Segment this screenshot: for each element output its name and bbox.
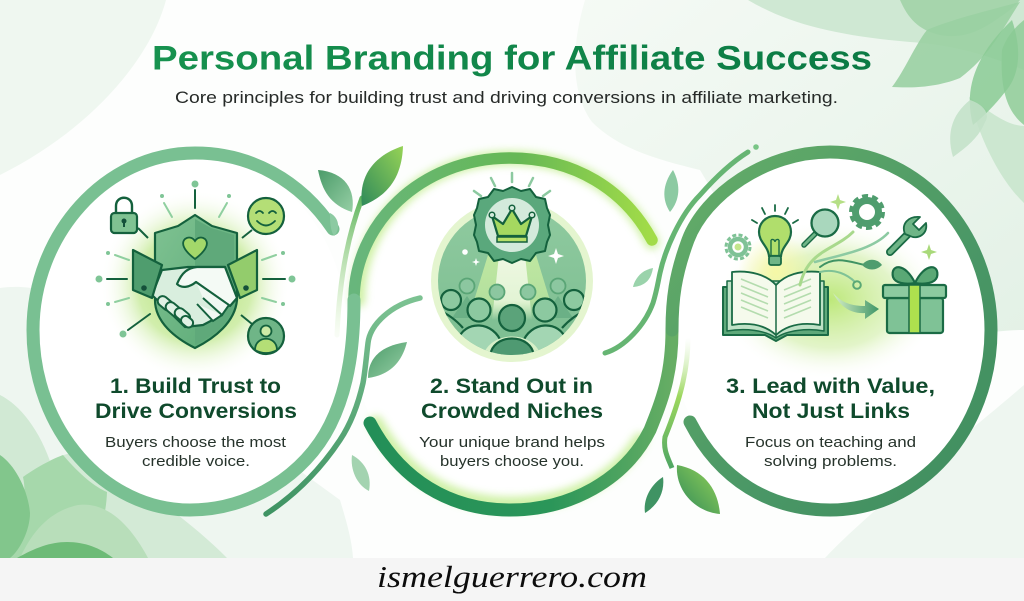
- background: bottom-right pale blob: [825, 385, 1024, 558]
- body text 2: Your unique brand helps: [419, 434, 605, 451]
- leaf: middle: [368, 342, 407, 378]
- icon: spotlight disc: [431, 200, 593, 362]
- panel 2: stand out: [354, 158, 672, 510]
- icon: person badge: [241, 315, 284, 354]
- heading 2: Crowded Niches: [421, 400, 603, 423]
- ring 2 top arc: [354, 158, 652, 300]
- leaf: top large: [361, 146, 403, 206]
- vine: upper left stem: [337, 198, 362, 335]
- icon: ring dot: [853, 281, 861, 289]
- icon: badge rays: [474, 173, 550, 196]
- sparkle: [830, 194, 846, 210]
- icon: trust shield: [155, 215, 237, 348]
- heading 3: 3. Lead with Value,: [726, 375, 935, 398]
- body text 3: solving problems.: [764, 453, 897, 470]
- vines and leaves: [266, 144, 759, 514]
- icon: radiating rays: [96, 180, 296, 338]
- arrow to gift: [833, 293, 879, 319]
- ring 1: [33, 153, 354, 510]
- icon: smiley: [242, 198, 284, 238]
- panel: ring 3 interior: [671, 152, 991, 510]
- idea swooshes: [800, 232, 888, 285]
- panel 1: build trust: [33, 153, 354, 510]
- body text 3: Focus on teaching and: [745, 434, 916, 451]
- leaf: mid right: [633, 268, 653, 287]
- dot on vine end: [753, 144, 759, 150]
- body text 1: [105, 434, 287, 470]
- icon: light bulb: [752, 205, 798, 265]
- icon: handshake: [133, 250, 257, 329]
- heading 1: Drive Conversions: [95, 400, 297, 423]
- body text 3: [745, 434, 916, 470]
- background: top-right pale blob: [575, 0, 1024, 340]
- sparkle: [921, 244, 937, 260]
- leaf: small left: [330, 213, 338, 236]
- footer band: [0, 558, 1024, 601]
- subtitle: Core principles for building trust and driving conversions in affiliate marketing.: [175, 89, 838, 107]
- icon: large gear: [851, 196, 883, 228]
- icon glow: [100, 190, 290, 380]
- vine: right of middle: [605, 152, 748, 353]
- heading 2: [421, 375, 603, 423]
- icon: magnifier: [804, 210, 838, 245]
- ring 3: [672, 152, 991, 510]
- body text 2: buyers choose you.: [440, 453, 584, 470]
- background: left pale blob: [0, 287, 353, 558]
- sparkles: [462, 248, 564, 266]
- body text 1: credible voice.: [142, 453, 250, 470]
- icon: wrench: [890, 217, 926, 252]
- background: top-right pale leaf sweep: [748, 0, 1024, 70]
- icon: gift box: [883, 267, 946, 333]
- spotlight beams: [474, 255, 550, 316]
- heading 1: [95, 375, 297, 423]
- leaf: dark lower: [645, 477, 663, 513]
- vine: lower right fading stem: [665, 338, 688, 468]
- vine: lower middle to ring 1: [266, 298, 420, 514]
- icon: open book: [723, 272, 828, 341]
- leaf: upper right: [664, 170, 678, 212]
- title: Personal Branding for Affiliate Success: [152, 40, 872, 78]
- background: bottom-left foliage: [0, 395, 227, 558]
- icon: small gear: [726, 235, 750, 259]
- background: top-left pale blob: [0, 0, 166, 175]
- heading 1: 1. Build Trust to: [110, 375, 281, 398]
- icon glow: [718, 220, 942, 380]
- leaf: pale lower: [352, 455, 370, 491]
- heading 2: 2. Stand Out in: [430, 375, 593, 398]
- panel: ring 2 interior: [352, 160, 672, 510]
- heading 3: Not Just Links: [752, 400, 910, 423]
- leaf: top left: [318, 170, 353, 212]
- ring 2 glow: [358, 158, 652, 504]
- footer website text: ismelguerrero.com: [377, 559, 647, 594]
- background: top-right leaves: [892, 0, 1024, 203]
- heading 3: [726, 375, 935, 423]
- audience: [438, 278, 587, 362]
- panel: ring 1 interior: [33, 153, 347, 509]
- icon: small vine leaf: [862, 260, 882, 270]
- body text 1: Buyers choose the most: [105, 434, 287, 451]
- icon: crown badge: [474, 187, 550, 263]
- leaf: big lower right: [677, 465, 720, 514]
- ring 2 bottom arc: [370, 330, 672, 510]
- icon: padlock: [111, 198, 148, 238]
- panel 3: lead with value: [672, 152, 991, 510]
- body text 2: [419, 434, 605, 470]
- icon: book light glow: [738, 234, 814, 310]
